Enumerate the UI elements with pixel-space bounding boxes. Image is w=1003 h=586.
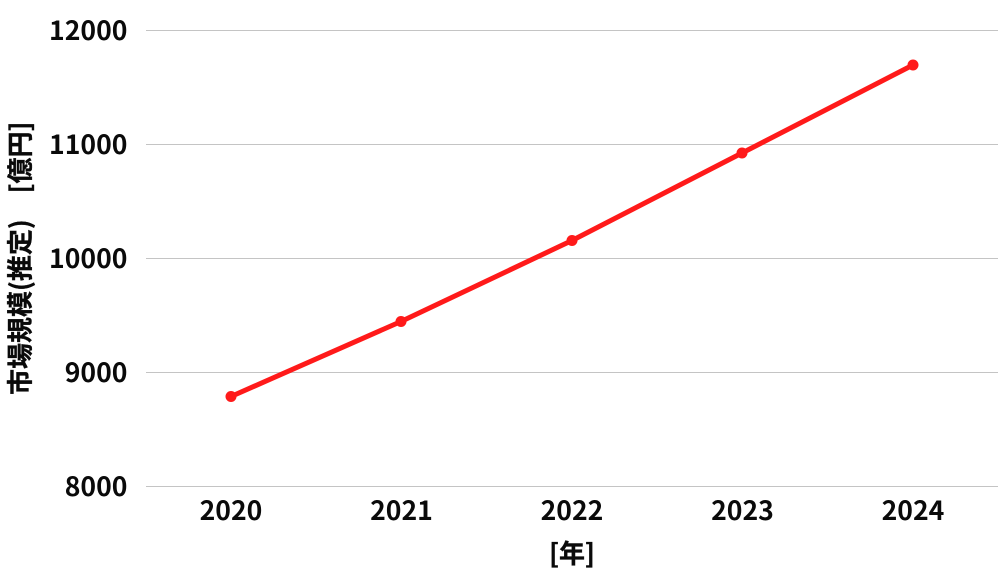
y axis tick labels: 10000: [49, 237, 128, 276]
x axis tick labels: [200, 489, 944, 528]
y axis title: 市場規模(推定) [億円]: [0, 122, 38, 395]
x axis tick labels: 2024: [882, 489, 944, 528]
y axis tick labels: 12000: [49, 9, 128, 48]
x axis tick labels: 2020: [200, 489, 262, 528]
y axis tick labels: 11000: [49, 123, 128, 162]
y axis tick labels: 8000: [65, 465, 128, 504]
x axis title: [年]: [549, 534, 595, 571]
x axis tick labels: 2022: [541, 489, 603, 528]
y axis tick labels: 9000: [65, 351, 128, 390]
x axis tick labels: 2023: [711, 489, 774, 528]
y axis tick labels: [49, 9, 128, 504]
data series: market size line: [226, 60, 918, 402]
x axis tick labels: 2021: [370, 489, 433, 528]
